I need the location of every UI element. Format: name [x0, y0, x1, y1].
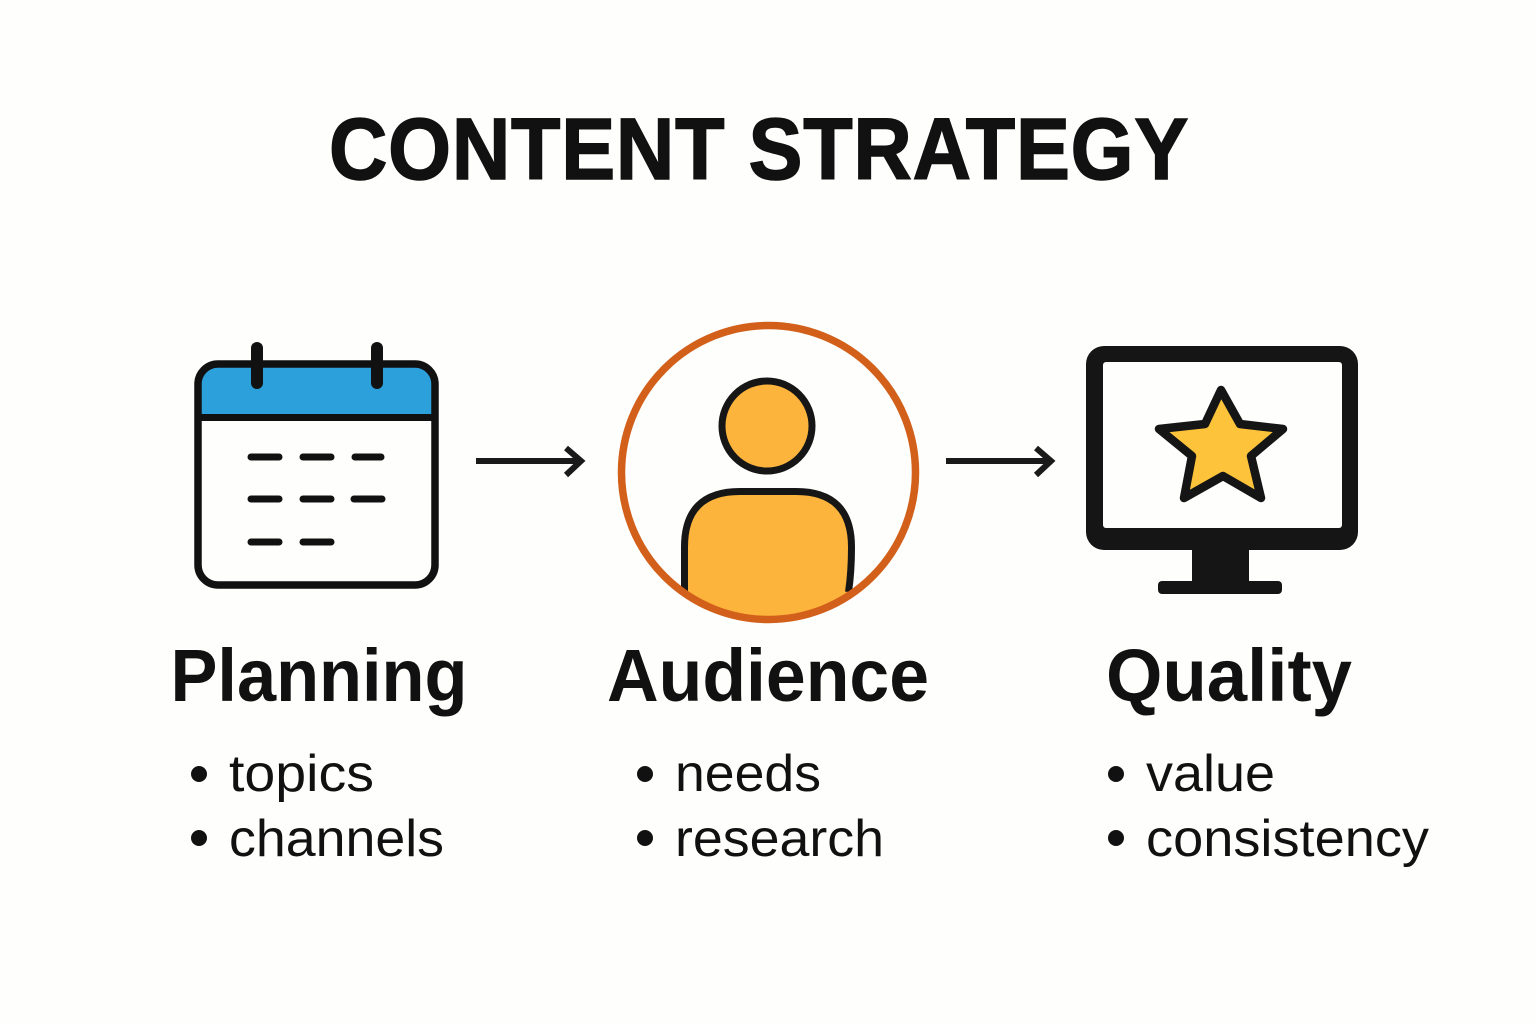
list: audience bullets: needs [675, 745, 821, 803]
title: CONTENT STRATEGY [329, 100, 1188, 198]
heading: Planning: Planning [170, 634, 468, 717]
list: audience bullets: research [675, 810, 884, 868]
icon: monitor with star [1086, 346, 1358, 594]
list: quality bullets: consistency [1146, 810, 1429, 868]
arrow: audience to quality [946, 448, 1051, 475]
list: planning bullets: channels [229, 810, 444, 868]
list: planning bullets [191, 745, 444, 868]
list: quality bullets [1108, 745, 1429, 868]
list: audience bullets [637, 745, 884, 868]
icon: calendar [198, 348, 435, 585]
list: planning bullets: topics [229, 745, 374, 803]
list: quality bullets: value [1146, 745, 1275, 803]
icon: audience person [622, 326, 916, 620]
arrow: planning to audience [476, 448, 581, 475]
heading: Quality: Quality [1106, 634, 1352, 717]
heading: Audience: Audience [607, 634, 929, 717]
